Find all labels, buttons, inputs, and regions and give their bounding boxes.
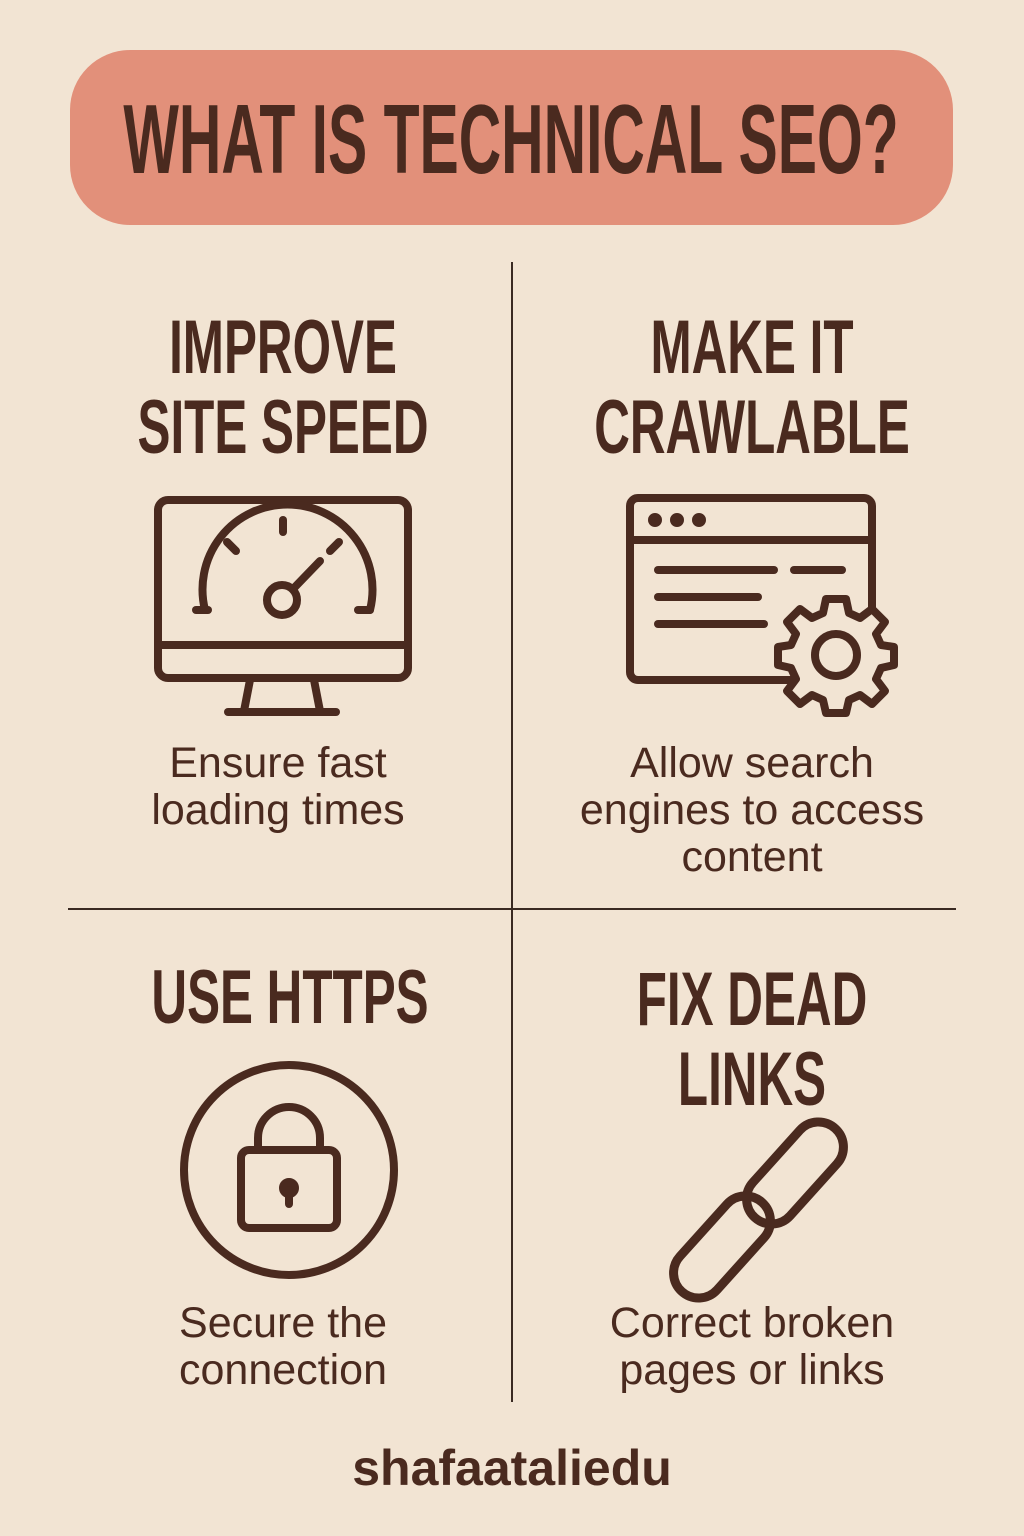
text: allow search engines [580, 739, 924, 881]
text: secure the connection: Secure the [179, 1299, 387, 1347]
heading: improve site speed: SITE SPEED [138, 385, 428, 470]
heading: make it crawlable: CRAWLABLE [594, 385, 910, 470]
title banner [70, 50, 953, 225]
icon: lock in circle [180, 1061, 398, 1279]
heading: improve site speed [138, 305, 428, 470]
panel: fix dead links [610, 957, 894, 1394]
heading: use https: USE HTTPS [151, 955, 429, 1040]
heading: fix dead links: LINKS [678, 1037, 826, 1122]
text: ensure fast loading times: loading times [151, 786, 405, 834]
text: allow search engines: content [681, 833, 823, 881]
text: secure the connection: connection [179, 1346, 387, 1394]
heading: fix dead links [637, 957, 867, 1122]
heading: make it crawlable [594, 305, 910, 470]
text: secure the connection [179, 1299, 387, 1394]
text: correct broken pages: pages or links [619, 1346, 885, 1394]
panel: use https [151, 955, 429, 1394]
text: allow search engines: Allow search [630, 739, 874, 787]
panel: improve site speed [138, 305, 428, 834]
text: allow search engines: engines to access [580, 786, 924, 834]
icon: browser with gear [626, 494, 898, 717]
heading: improve site speed: IMPROVE [169, 305, 397, 390]
icon: chain link [669, 1118, 848, 1302]
text: ensure fast loading times [151, 739, 405, 834]
text: correct broken pages: Correct broken [610, 1299, 894, 1347]
heading: make it crawlable: MAKE IT [650, 305, 854, 390]
title text: WHAT IS TECHNICAL SEO? [123, 84, 899, 194]
icon: monitor speedometer [154, 496, 412, 716]
heading: fix dead links: FIX DEAD [637, 957, 867, 1042]
text: correct broken pages [610, 1299, 894, 1394]
footer: brand: shafaataliedu [352, 1440, 672, 1496]
panel: make it crawlable [580, 305, 924, 881]
text: ensure fast loading times: Ensure fast [169, 739, 387, 787]
